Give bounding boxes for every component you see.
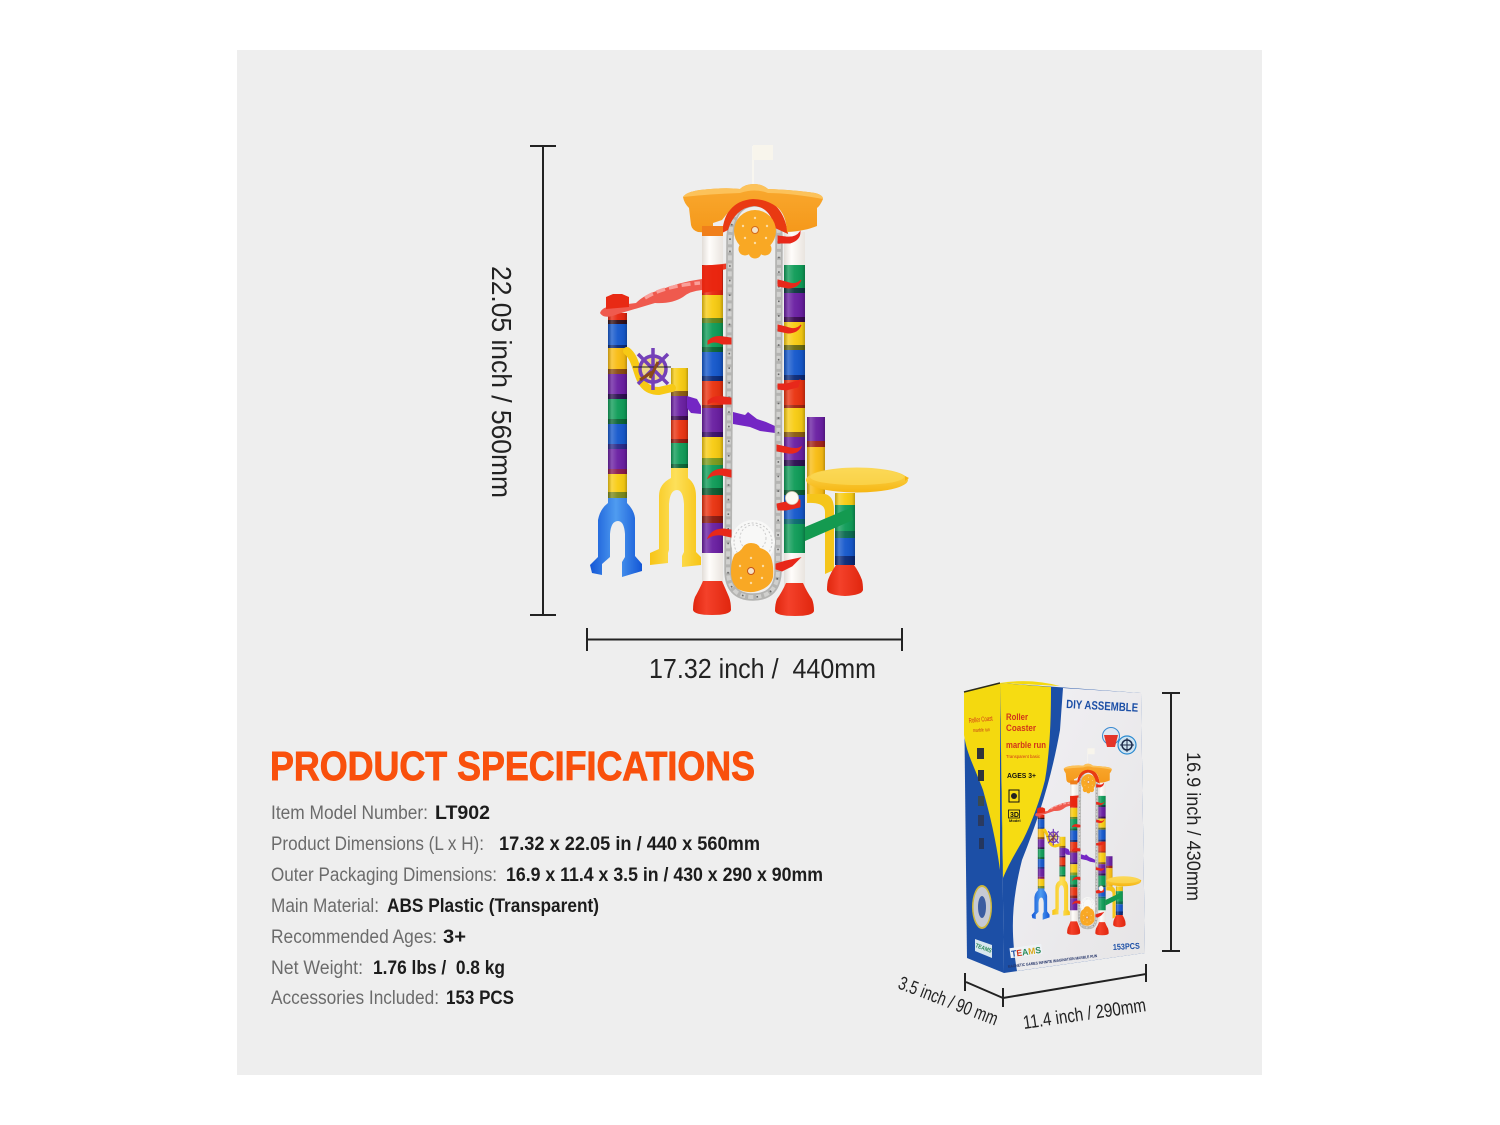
dimension: box depth and width [965,964,1146,1007]
left tower [702,265,723,553]
box text: diy assemble: DIY ASSEMBLE [1066,697,1138,715]
spec: item model number: Item Model Number: [271,803,428,824]
box side panel: Roller Coast [968,716,993,725]
spec: net weight [271,958,505,979]
spec: net weight: 1.76 lbs / 0.8 kg [373,958,505,979]
spec: main material: Main Material: [271,896,379,917]
box text: product name: Transparent basic [1006,754,1041,759]
orange roof [683,184,823,236]
spec: product dimensions: 17.32 x 22.05 in / 440 x 560mm [499,834,760,855]
spec: recommended ages: 3+ [443,927,466,948]
white upper pipes [702,232,805,586]
box text: ages: AGES 3+ [1007,771,1037,780]
specification list [271,803,823,1009]
box photo of marble run [1032,748,1141,935]
box text: product name [1006,712,1046,759]
label: product height: 22.05 inch / 560mm [486,266,517,498]
dimension: box height [1162,693,1180,951]
chain [728,203,779,597]
red bases [693,581,814,616]
plate column and base [807,417,863,596]
box icon: 3d model badges: 3D [1010,812,1019,819]
top gear [734,210,776,258]
spec: recommended ages: Recommended Ages: [271,927,437,948]
far left column [608,313,627,499]
box text: piece count: 153PCS [1113,941,1140,952]
box text: product name: marble run [1006,740,1046,750]
blue fork leg [590,498,642,577]
panel: grey background [237,50,1262,1075]
spec: accessories included: Accessories Included: [271,988,439,1009]
spec: product dimensions: Product Dimensions (L x H): [271,834,484,855]
dimension: height of product [530,146,556,615]
title: PRODUCT SPECIFICATIONS [270,743,755,789]
purple ramps [687,396,775,433]
spec: outer packaging dimensions: Outer Packaging Dimensions: [271,865,497,886]
product photo: assembled marble run [590,145,909,616]
spec: main material: ABS Plastic (Transparent) [387,896,599,917]
spec: main material [271,896,599,917]
red chain clips [708,232,801,571]
white marble [786,492,798,504]
bottom gear [731,543,773,592]
dimension: width of product [587,628,902,651]
label: box width: 11.4 inch / 290mm [1022,995,1147,1034]
box logo: teams: TEAMS [1011,945,1042,959]
box icon: feature badges [1102,728,1136,754]
label: product width: 17.32 inch / 440mm [649,653,876,684]
box text: product name: Roller [1006,712,1028,722]
box side panel: TEAMS [974,943,992,955]
spec: item model number: LT902 [435,803,490,824]
box side panel [964,683,1004,973]
spec: accessories included: 153 PCS [446,988,514,1009]
waterwheel [633,348,671,390]
packaging box [964,681,1145,973]
box side panel: marble run [973,727,990,734]
yellow fork leg [650,468,701,567]
second column [671,368,688,468]
clear dome [731,520,775,564]
box icon: 3d model badges [1008,790,1021,823]
spec: net weight: Net Weight: [271,958,363,979]
red slide [600,263,731,317]
box front panel [1000,681,1145,973]
spec: outer packaging dimensions [271,865,823,886]
box icon: 3d model badges: Model [1009,818,1021,823]
yellow plate [806,468,909,492]
flag [752,145,773,186]
label: box height: 16.9 inch / 430mm [1182,752,1203,901]
box text: bottom strapline: MAGNETIC GAMES INFINITE IMAGINATION MARBLE RUN [1008,953,1098,969]
yellow arch behind right tower [807,494,834,574]
yellow ramp under wheel [627,351,672,391]
green slide [805,508,853,541]
spec: product dimensions [271,834,760,855]
right tower [784,265,805,553]
spec: outer packaging dimensions: 16.9 x 11.4 x 3.5 in / 430 x 290 x 90mm [506,865,823,886]
box text: product name: Coaster [1006,723,1036,733]
label: box depth: 3.5 inch / 90 mm [895,973,1001,1030]
